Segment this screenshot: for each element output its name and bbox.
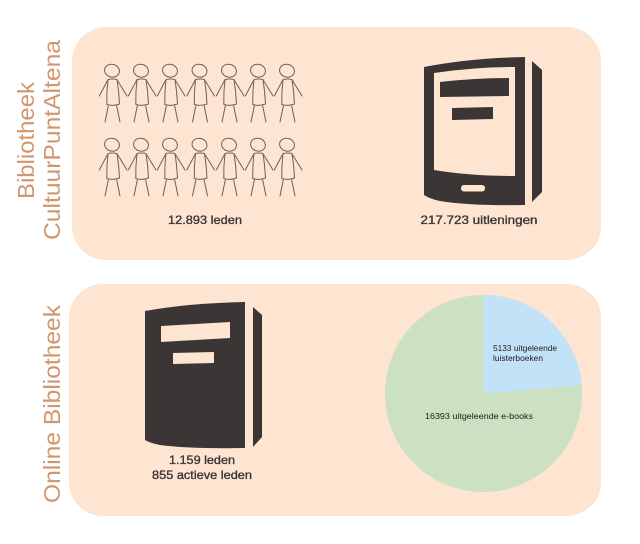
pie slice: luisterboeken <box>484 295 582 394</box>
heading: Bibliotheek CultuurPuntAltena: Bibliotheek <box>13 81 39 199</box>
panel: CultuurPuntAltena <box>72 27 601 260</box>
pie slice: e-books <box>385 295 582 492</box>
heading: Online Bibliotheek: Online Bibliotheek <box>39 304 65 503</box>
icon: e-reader <box>424 57 542 205</box>
pie label: luisterboeken: 5133 uitgeleende <box>493 343 557 353</box>
heading: Bibliotheek CultuurPuntAltena: CultuurPuntAltena <box>39 40 65 240</box>
pie label: e-books: 16393 uitgeleende e-books <box>425 411 533 421</box>
label: leden count: 12.893 leden <box>168 213 242 227</box>
panel: Online Bibliotheek <box>69 284 601 516</box>
label: online leden counts: 855 actieve leden <box>152 468 252 482</box>
pie chart <box>385 295 582 492</box>
label: online leden counts <box>152 453 252 482</box>
icon: book <box>145 302 262 448</box>
label: uitleningen count: 217.723 uitleningen <box>420 213 538 227</box>
pie label: luisterboeken: luisterboeken <box>493 353 543 363</box>
heading: Bibliotheek CultuurPuntAltena <box>13 40 65 240</box>
pie label: luisterboeken <box>493 343 557 363</box>
label: online leden counts: 1.159 leden <box>169 453 235 467</box>
icon: people rows <box>99 63 302 196</box>
